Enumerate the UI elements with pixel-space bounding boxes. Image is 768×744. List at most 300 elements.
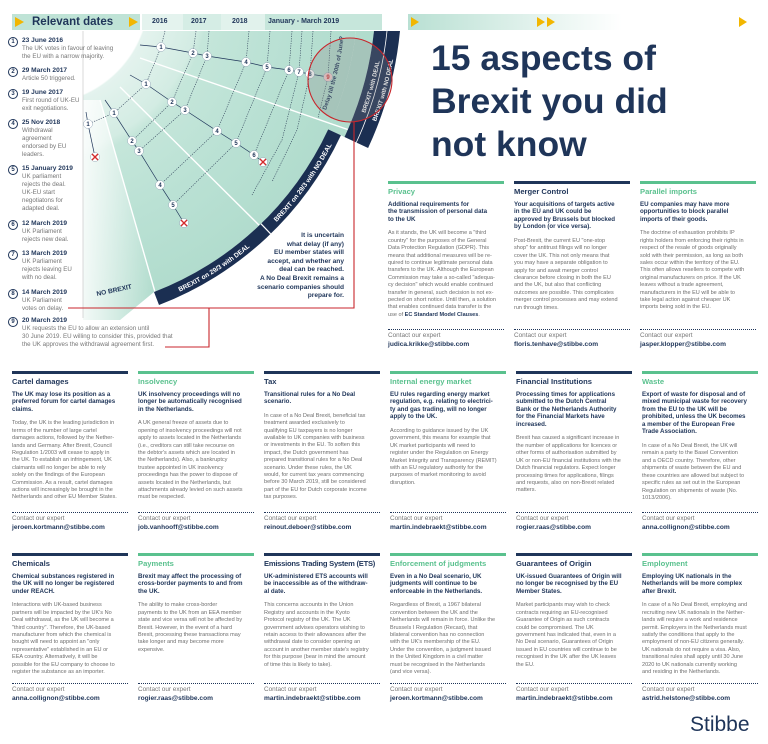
panel: emissions trading system	[264, 553, 380, 702]
panel: enforcement of judgments: Netherlands will remain in force. Unlike the	[390, 617, 495, 623]
panel: insolvency: job.vanhooff@stibbe.com	[138, 524, 219, 530]
panel: payments	[138, 553, 254, 702]
panel: chemicals	[12, 553, 128, 702]
panel: merger control: Contact our expert	[514, 332, 567, 339]
panel: parallel imports: imports being sold in the EU.	[640, 304, 711, 310]
panel: parallel imports: imports of their goods.	[640, 216, 707, 223]
panel: guarantees of origin: Contact our expert	[516, 686, 569, 693]
panel: tax: part of the EU for Dutch corporate income	[264, 487, 367, 493]
panel: cartel damages: Contact our expert	[12, 515, 65, 522]
panel: waste: prohibited, unless the UK becomes	[642, 413, 746, 420]
panel: emissions trading system: martin.indebraekt@stibbe.com	[264, 694, 361, 702]
panel: waste: In case of a No Deal Brexit, the UK will	[642, 443, 737, 449]
panel: payments: rogier.raas@stibbe.com	[138, 694, 213, 702]
panel: internal energy market: purposes of market monitoring to avoid	[390, 472, 486, 478]
panel: emissions trading system: account in another member state's registry	[264, 647, 369, 653]
panel: employment: employment of non-EU citizens generally.	[642, 639, 744, 645]
header: gradient bar with triangles	[408, 14, 622, 30]
panel: employment: astrid.helstone@stibbe.com	[642, 694, 730, 702]
text: uncertainty note: prepare for.	[308, 292, 344, 299]
timeline nodes: 2	[170, 100, 174, 106]
panel: parallel imports: rights holders from enforcing their rights in	[640, 238, 744, 244]
panel: payments: The ability to make cross-border	[138, 602, 217, 608]
panel: guarantees of origin: issued in EU countries will continue to be	[516, 647, 617, 653]
panel: enforcement of judgments: Under the convention, a judgment issued	[390, 647, 491, 653]
date 8: UK Parliament	[22, 297, 62, 304]
timeline nodes: 8	[308, 72, 312, 78]
panel: enforcement of judgments: Enforcement of judgments	[390, 558, 486, 568]
panel: internal energy market: ty and gas trading, will no longer	[390, 406, 487, 413]
panel: payments: Brexit. However, in the event of a hard	[138, 624, 232, 630]
panel: insolvency: (i.e., creditors can still take recourse on	[138, 442, 234, 448]
panel: chemicals: Deal withdrawal, as the UK will become a	[12, 617, 114, 623]
date 7: rejects leaving EU	[22, 266, 72, 273]
outcome bands: BREXIT on 29/3 with NO DEAL	[274, 144, 332, 222]
panel: merger control: floris.tenhave@stibbe.com	[514, 340, 598, 348]
panel: waste: and a OECD country. Therefore, other	[642, 458, 736, 464]
panel: merger control: merger control processes and may extend	[514, 297, 618, 303]
outcome bands: BREXIT with DEAL	[362, 61, 380, 113]
panel: cartel damages: Commission. As a result, cartel damages	[12, 480, 112, 486]
panel: payments: the UK.	[138, 588, 160, 595]
panel: chemicals: the UK will no longer be registered	[12, 580, 114, 587]
panel: parallel imports: jasper.klopper@stibbe.com	[640, 340, 726, 348]
header: years bar	[142, 14, 382, 30]
panel: emissions trading system: al date.	[264, 588, 285, 595]
text: uncertainty note	[257, 232, 344, 299]
panel: privacy: pected on short notice. Until then, a solution	[388, 297, 496, 303]
panel: guarantees of origin: No Deal scenario, Guarantees of Origin	[516, 639, 613, 645]
panel: guarantees of origin: martin.indebraekt@stibbe.com	[516, 694, 613, 702]
date 5: UK parliament	[22, 173, 61, 180]
panel: tax: reinout.deboer@stibbe.com	[264, 524, 351, 530]
panel: parallel imports: sold with their permission, as long as both	[640, 252, 743, 258]
delay label: Delay till the 30th of June?	[322, 36, 344, 110]
panel: employment: In case of a No Deal Brexit, employing and	[642, 602, 747, 608]
panel: financial institutions	[516, 371, 632, 530]
panel: insolvency: UK insolvency proceedings will no	[138, 390, 240, 398]
timeline nodes: 5	[171, 203, 175, 209]
timeline nodes: 1	[86, 122, 90, 128]
panel: financial institutions: and requests, also on non-Brexit related	[516, 480, 614, 486]
panel: chemicals: partners will be impacted by the UK's No	[12, 610, 112, 616]
panel: enforcement of judgments: Contact our expert	[390, 686, 443, 693]
date 1: the EU with a narrow majority.	[22, 53, 104, 60]
date 9	[8, 317, 173, 348]
panel: payments: Contact our expert	[138, 686, 191, 693]
panel: parallel imports: EU companies may have more	[640, 200, 729, 208]
panel: guarantees of origin: the EU.	[516, 662, 534, 668]
panel: payments: state and vice versa will not be affected by	[138, 617, 242, 623]
panel: chemicals: register the substance as an importer.	[12, 669, 105, 675]
panel: privacy: Additional requirements for	[388, 200, 469, 208]
panel: emissions trading system: of time this is likely to take).	[264, 662, 332, 668]
header: years bar: 2016	[152, 18, 168, 25]
panel: employment	[642, 553, 758, 702]
panel: payments: take longer and may become more	[138, 639, 224, 645]
panel: internal energy market: register under the Regulation on Energy	[390, 450, 488, 456]
panel: merger control: and the UK, but also that conflicting	[514, 282, 601, 288]
panel: internal energy market	[390, 371, 506, 530]
panel: enforcement of judgments: jeroen.kortmann@stibbe.com	[390, 694, 483, 702]
panel: financial institutions: processing times for applications, filings	[516, 472, 614, 478]
date 8: votes on delay.	[22, 305, 63, 312]
panel: privacy: As it stands, the UK will become a "third	[388, 230, 486, 236]
date 6	[8, 220, 68, 243]
dates list: 5	[11, 166, 15, 172]
panel: employment: UK nationals do not require a visa. Also,	[642, 647, 740, 653]
panel: parallel imports: sales occur within the territory of the EU.	[640, 260, 740, 266]
panel: insolvency: A UK general freeze of assets due to	[138, 420, 228, 426]
panel: tax: available to UK companies with business	[264, 435, 365, 441]
panel: employment: permit. Employers in the Netherlands must	[642, 624, 747, 630]
date 5: adapted deal.	[22, 205, 60, 212]
panel: employment: recruiting new UK nationals in the Nether-	[642, 610, 745, 616]
panel: tax: tax purposes.	[264, 494, 297, 500]
panel: waste: a member of the European Free	[642, 421, 735, 428]
panel: enforcement of judgments: Even in a No Deal scenario, UK	[390, 572, 481, 580]
timeline nodes: 4	[244, 60, 248, 66]
panel: waste: mixed municipal waste for recovery	[642, 398, 747, 405]
panel: privacy: Contact our expert	[388, 332, 441, 339]
date 3: First round of UK-EU	[22, 97, 79, 104]
text: uncertainty note: deal can be reached.	[279, 266, 344, 273]
timeline nodes: 3	[183, 108, 187, 114]
month arcs	[88, 31, 331, 205]
fan background	[83, 31, 374, 320]
panel: privacy: Privacy	[388, 186, 415, 196]
panel: cartel damages: Regulation 1/2003 will cease to apply in	[12, 450, 109, 456]
panel: guarantees of origin: Member States.	[516, 588, 562, 595]
panel: financial institutions: increased.	[516, 421, 547, 428]
panel: privacy: means that additional measures will be re-	[388, 252, 492, 258]
panel: emissions trading system: retain access to their allowances after the	[264, 632, 366, 638]
panel: insolvency: longer be automatically recognised	[138, 398, 242, 405]
panel: guarantees of origin: UK-issued Guarantees of Origin will	[516, 572, 622, 580]
panel: tax: before 30 March 2019, still be considered	[264, 479, 366, 485]
panel: cartel damages: claims.	[12, 406, 33, 413]
panel: chemicals: possible for the EU company to choose to	[12, 662, 115, 668]
panel: internal energy market: Internal energy market	[390, 376, 471, 386]
panel: employment: Contact our expert	[642, 686, 695, 693]
dates list: 6	[11, 222, 15, 228]
panel: employment: Employment	[642, 558, 688, 568]
panel: insolvency: the Netherlands). Also, a bankruptcy	[138, 457, 227, 463]
date 2: 29 March 2017	[22, 67, 67, 74]
text: uncertainty note: It is uncertain	[301, 232, 344, 239]
timeline nodes: 4	[215, 129, 219, 135]
outcome bands: BREXIT on 29/3 with DEAL	[178, 245, 250, 292]
panel: merger control: Post-Brexit, the current EU "one-stop	[514, 238, 605, 244]
panel: privacy: transfers to the UK. Although the European	[388, 267, 494, 273]
timeline nodes: 1	[144, 82, 148, 88]
date 4: endorsed by EU	[22, 143, 66, 150]
panel: emissions trading system: Registry and accounts in the Kyoto	[264, 610, 350, 616]
panel: enforcement of judgments: Regardless of Brexit, a 1967 bilateral	[390, 602, 481, 608]
panel: merger control: by London (or vice versa).	[514, 223, 591, 230]
timeline nodes: 5	[234, 141, 238, 147]
panel: waste	[642, 371, 758, 530]
panel: privacy	[388, 181, 504, 348]
date 7: with no deal.	[22, 274, 57, 281]
date 4	[8, 119, 66, 158]
timeline nodes: 6	[252, 153, 256, 159]
panel: cartel damages: lands and Germany. After Brexit, Council	[12, 442, 112, 448]
panel: guarantees of origin: Market participants may wish to check	[516, 602, 610, 608]
panel: enforcement of judgments: judgments will continue to be	[390, 580, 477, 587]
timeline nodes: 4	[158, 183, 162, 189]
panel: merger control: in the EU and UK could be	[514, 208, 591, 215]
panel: waste: Waste	[642, 376, 664, 386]
panel: privacy: quired to continue legitimate personal data	[388, 260, 493, 266]
panel: tax: or investments in the EU. To soften this	[264, 442, 360, 448]
panel: cartel damages: jeroen.kortmann@stibbe.com	[12, 524, 105, 530]
panel: cartel damages: The UK may lose its position as a	[12, 390, 110, 398]
date 3: exit negotiations.	[22, 105, 68, 112]
panel: employment: 2020 to UK nationals currently working	[642, 662, 737, 668]
title: 15 aspects of	[431, 38, 656, 78]
panel: enforcement of judgments	[390, 553, 506, 702]
panel: waste: from the EU to the UK will be	[642, 406, 727, 413]
panel: merger control: run through times.	[514, 305, 559, 311]
label: no brexit: NO BREXIT	[96, 284, 133, 298]
date 6: UK Parliament	[22, 228, 62, 235]
dates list: 7	[11, 252, 15, 258]
panel: cartel damages: actions will increasingly be brought in the	[12, 487, 113, 493]
panel: internal energy market: regulation, e.g. relating to electrici-	[390, 398, 493, 405]
panel: cartel damages: Cartel damages	[12, 376, 69, 386]
panel: chemicals: under REACH.	[12, 588, 55, 595]
date 5: negotiatons for	[22, 197, 63, 204]
panel: guarantees of origin: Guarantee of Origin as such contracts	[516, 617, 609, 623]
title	[431, 38, 668, 164]
panel: privacy: that enables continued data transfer is the	[388, 304, 491, 310]
panel: cartel damages: terms of the number of large cartel	[12, 428, 97, 434]
date 8: 14 March 2019	[22, 289, 67, 296]
date 3: 19 June 2017	[22, 89, 63, 96]
panel: privacy: transfer in general, such decision is not ex-	[388, 290, 493, 296]
panel: insolvency: proceedings has the power to dispose of	[138, 472, 238, 478]
panel: enforcement of judgments: Brussels I Regulation (Recast), that	[390, 624, 477, 630]
timeline nodes	[84, 42, 332, 228]
timeline nodes: 3	[137, 149, 141, 155]
panel: emissions trading system: be inaccessible as of the withdraw-	[264, 580, 368, 587]
icon: yellow triangle right	[129, 17, 138, 27]
panel: parallel imports: Parallel imports	[640, 186, 697, 196]
panel: financial institutions: Financial Institutions	[516, 376, 592, 386]
radial timeline chart	[68, 30, 400, 348]
panel: insolvency: in the Netherlands.	[138, 406, 194, 413]
panel: insolvency: must be respected.	[138, 494, 185, 500]
panel: payments: expensive.	[138, 647, 165, 653]
timeline nodes: 6	[287, 68, 291, 74]
panel: employment: Employing UK nationals in the	[642, 572, 731, 580]
panel: guarantees of origin: government has indicated that, even in a	[516, 632, 616, 638]
date 7: 13 March 2019	[22, 250, 67, 257]
panel: payments: Payments	[138, 558, 174, 568]
panel: financial institutions: UK or non-EU financial institutions with the	[516, 458, 621, 464]
panel: payments: Brexit, processing these transactions may	[138, 632, 241, 638]
panel: tax: treatment awarded exclusively to	[264, 420, 345, 426]
panel: enforcement of judgments: (and vice versa).	[390, 669, 431, 675]
panel: payments: Brexit may affect the processing of	[138, 572, 241, 580]
panel: insolvency: the debtor's assets which are located in	[138, 450, 235, 456]
panel: guarantees of origin: Guarantees of Origin	[516, 558, 592, 568]
panel: chemicals: "third country". Therefore, the UK-based	[12, 624, 110, 630]
timeline nodes: 2	[191, 51, 195, 57]
panel: cartel damages: claimants will no longer be able to rely	[12, 465, 106, 471]
date 8	[8, 289, 67, 312]
panel: financial institutions: rogier.raas@stibbe.com	[516, 524, 591, 530]
date 5: rejects the deal.	[22, 181, 66, 188]
outcome bands: BREXIT with NO DEAL	[372, 60, 394, 122]
panel: cartel damages: Netherlands and other EU Member States.	[12, 494, 117, 500]
panel: enforcement of judgments: convention between the UK and the	[390, 610, 478, 616]
panel: parallel imports: respect of the resale of goods originally	[640, 245, 737, 251]
panel: chemicals: representative" established in an EU or	[12, 647, 108, 653]
panel: parallel imports: original manufacturers on price. If the UK	[640, 275, 741, 281]
header: relevant dates bar	[12, 14, 140, 30]
panel: privacy: country" for the purposes of the General	[388, 238, 486, 244]
panel: insolvency: Contact our expert	[138, 515, 191, 522]
panel: guarantees of origin: recognised in the UK after the UK leaves	[516, 654, 616, 660]
panel: merger control	[514, 181, 630, 348]
panel: parallel imports: take legal action against cheaper UK	[640, 297, 730, 303]
scenario paths	[86, 45, 328, 223]
panel: guarantees of origin: no longer be recognised by the EU	[516, 580, 618, 587]
panel: merger control: outcomes are possible. This complicates	[514, 290, 614, 296]
dates list	[8, 37, 173, 348]
panel: emissions trading system: Protocol registry of the UK. The UK	[264, 617, 351, 623]
panel: insolvency: apply to assets located in the Netherlands	[138, 435, 241, 441]
timeline nodes: 7	[297, 70, 301, 76]
panel: privacy: judica.krikke@stibbe.com	[388, 340, 469, 348]
panel: parallel imports: opportunities to block parallel	[640, 208, 728, 215]
panel: emissions trading system: Contact our expert	[264, 686, 317, 693]
panel: internal energy market: Contact our expert	[390, 515, 443, 522]
panel: tax: scenario.	[264, 398, 291, 405]
panel: waste: specific rules as set out in the European	[642, 480, 740, 486]
panel: internal energy market: According to guidance issued by the UK	[390, 428, 488, 434]
panel: merger control: shop" for antitrust filings will no longer	[514, 245, 607, 251]
panel: waste: 1013/2006).	[642, 495, 672, 501]
panel: parallel imports: This often allows resellers to compete with	[640, 267, 744, 273]
panel: merger control: clearance before closing in both the EU	[514, 275, 611, 281]
panel: enforcement of judgments: enforceable in the Netherlands.	[390, 588, 482, 595]
panel: tax: Contact our expert	[264, 515, 317, 522]
panel: chemicals: bought will need to appoint an "only	[12, 639, 99, 645]
panel: tax: impact, the Dutch government has	[264, 450, 348, 456]
panel: internal energy market: Market Integrity and Transparency (REMIT)	[390, 458, 497, 464]
panel: financial institutions: for the Financial Markets have	[516, 413, 605, 420]
panel: chemicals: Chemicals	[12, 558, 50, 568]
panel: cartel damages: Today, the UK is the leading jurisdiction in	[12, 420, 114, 426]
panel: guarantees of origin: contracts requiring an EU-recognised	[516, 610, 608, 616]
heading: relevant dates: Relevant dates	[32, 16, 113, 28]
panel: enforcement of judgments: must be recognised in the Netherlands	[390, 662, 485, 668]
panel: waste: Regulation on shipments of waste (No.	[642, 488, 737, 494]
panel: waste: Contact our expert	[642, 515, 695, 522]
panel: merger control: Merger Control	[514, 186, 568, 196]
icon: yellow triangle far right	[739, 17, 747, 27]
date 5: 15 January 2019	[22, 165, 73, 172]
logo: Stibbe: Stibbe	[690, 713, 750, 736]
date 4: 25 Nov 2018	[22, 119, 60, 126]
panel: chemicals: Contact our expert	[12, 686, 65, 693]
panel: financial institutions: submitted to the Dutch Central	[516, 398, 606, 405]
panel: payments: payments to the UK from an EEA member	[138, 610, 241, 616]
header: years bar: January - March 2019	[268, 18, 339, 25]
date 5: UK-EU start	[22, 189, 55, 196]
panel: emissions trading system: This concerns accounts in the Union	[264, 602, 353, 608]
panel: parallel imports: leaves without a trade agreement,	[640, 282, 724, 288]
timeline nodes: 3	[205, 54, 209, 60]
panel: internal energy market: with an EU regulatory authority for the	[390, 465, 483, 471]
panel: guarantees of origin	[516, 553, 632, 702]
panel: financial institutions: the number of applications for licences or	[516, 443, 617, 449]
panel: emissions trading system: Emissions Trading System (ETS)	[264, 558, 375, 568]
panel: cartel damages: damages actions, followed by the Nether-	[12, 435, 114, 441]
panel: financial institutions: Processing times for applications	[516, 390, 615, 398]
panel: chemicals: manufacturer from which the chemical is	[12, 632, 111, 638]
title: not know	[431, 124, 587, 164]
panel: privacy: cy decision" which would enable continued	[388, 282, 493, 288]
panel: tax: qualifying EU taxpayers is no longer	[264, 428, 352, 434]
panel: merger control: you may have a separate obligation to	[514, 260, 608, 266]
panel: internal energy market: EU rules regarding energy market	[390, 390, 489, 398]
timeline nodes: 9	[326, 75, 330, 81]
date 4: agreement	[22, 135, 52, 142]
panel: waste: shipments of waste between the EU and	[642, 465, 741, 471]
date 1	[8, 37, 113, 60]
panel: parallel imports	[640, 181, 756, 348]
date 4: Withdrawal	[22, 127, 53, 134]
panel: financial institutions: other forms of authorisation submitted by	[516, 450, 617, 456]
header: years bar: 2017	[191, 18, 207, 25]
date 7	[8, 250, 72, 281]
panel: employment: satisfy the conditions that apply to the	[642, 632, 735, 638]
panel: parallel imports: The doctrine of exhaustion prohibits IP	[640, 230, 735, 236]
panel: privacy: the transmission of personal data	[388, 208, 487, 215]
panel: waste: Trade Association.	[642, 428, 697, 435]
timeline nodes: 5	[265, 65, 269, 71]
dates list: 2	[11, 68, 15, 74]
text: uncertainty note: scenario companies should	[257, 284, 344, 291]
panel: emissions trading system: government advises operators wishing to	[264, 624, 365, 630]
panel: employment: transitional rules shall apply until 30 June	[642, 654, 743, 660]
panel: internal energy market: martin.indebraekt@stibbe.com	[390, 524, 487, 530]
dates list: 1	[11, 38, 15, 44]
panel: internal energy market: apply to the UK.	[390, 413, 437, 420]
panel: tax: Transitional rules for a No Deal	[264, 390, 355, 398]
dates list: 8	[11, 290, 15, 296]
panel: chemicals: anna.collignon@stibbe.com	[12, 694, 100, 702]
panel: emissions trading system: withdrawal date to consider opening an	[264, 639, 360, 645]
dates list: 4	[11, 120, 15, 126]
panel: insolvency: trustee appointed in UK insolvency	[138, 465, 223, 471]
text: uncertainty note: what delay (if any)	[287, 241, 344, 248]
date 9: UK requests the EU to allow an extension until	[22, 325, 149, 332]
panel: enforcement of judgments: in the United Kingdom in a civil matter	[390, 654, 483, 660]
panel: tax: prepared transitional rules for a No Deal	[264, 457, 362, 463]
panel: enforcement of judgments: with the UK's membership of the EU.	[390, 639, 480, 645]
panel: merger control: approved by Brussels but blocked	[514, 216, 615, 223]
panel: privacy: Commission may take a so-called "adequa-	[388, 275, 495, 281]
date 6: 12 March 2019	[22, 220, 67, 227]
panel: emissions trading system: UK-administered ETS accounts will	[264, 572, 368, 580]
panel: internal energy market: government, this means for example that	[390, 435, 491, 441]
panel: merger control: cover the UK. This not only means that	[514, 253, 609, 259]
